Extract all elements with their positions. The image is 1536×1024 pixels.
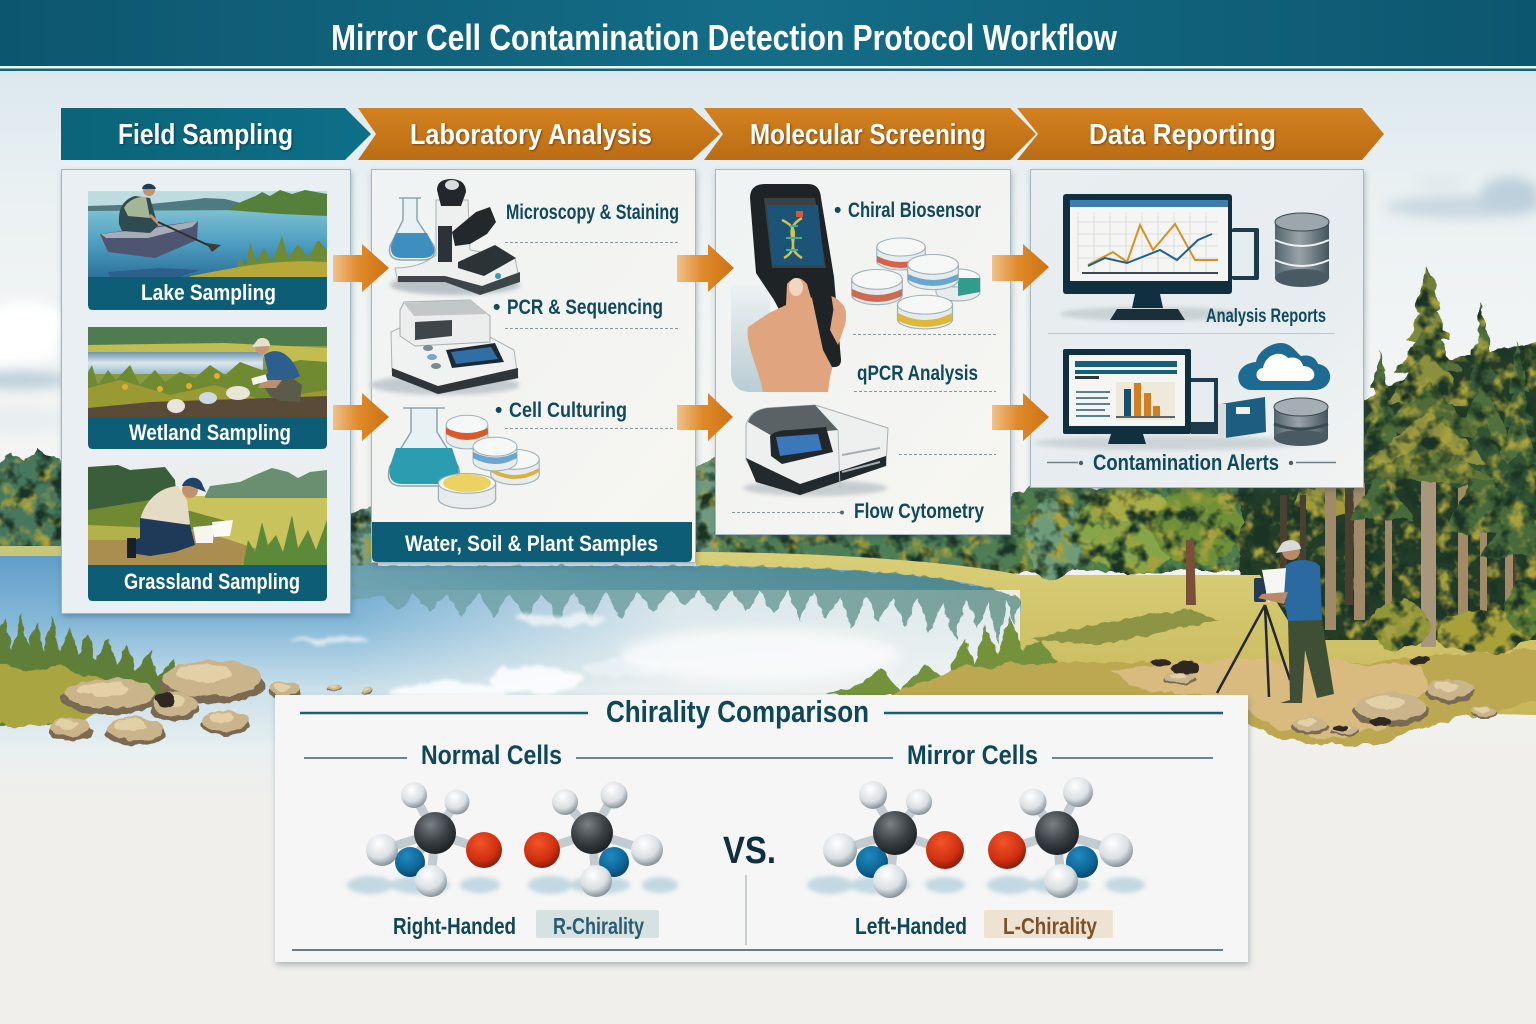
shore grass left [0, 612, 185, 725]
icon: PCR machine [370, 300, 520, 395]
label: Chiral Biosensor: Chiral Biosensor [848, 199, 981, 222]
heading: Mirror Cells: Mirror Cells [907, 740, 1038, 770]
arrow: lab to molecular bottom [677, 393, 733, 441]
rocks left [48, 660, 373, 746]
label: Wetland Sampling [88, 417, 327, 449]
label: PCR & Sequencing: PCR & Sequencing [507, 296, 663, 319]
forest floor shrubs [1370, 584, 1536, 654]
right ground [890, 650, 1536, 745]
icon: database stack [1275, 213, 1329, 287]
icon: database small [1274, 398, 1328, 446]
dark stones [155, 656, 1430, 731]
label: Wetland Sampling: Wetland Sampling [129, 420, 291, 445]
stage header: Field Sampling [61, 108, 371, 160]
stage header: Laboratory Analysis: Laboratory Analysis [410, 119, 652, 151]
lake clouds [290, 614, 658, 708]
label: Right-Handed: Right-Handed [393, 913, 516, 939]
conifers [1348, 265, 1536, 558]
stage header: Laboratory Analysis [358, 108, 720, 160]
label: Contamination Alerts: Contamination Alerts [1093, 450, 1279, 475]
shore band left [0, 546, 62, 556]
icon: alert monitor with bars [1035, 349, 1305, 450]
lake mist [350, 590, 1020, 705]
photo: lake sampling [88, 184, 327, 278]
label: Lake Sampling: Lake Sampling [141, 280, 276, 305]
label: L-Chirality: L-Chirality [1003, 913, 1097, 939]
surveyor figure with tripod [1217, 540, 1334, 703]
label: Water, Soil & Plant Samples: Water, Soil & Plant Samples [405, 531, 658, 556]
label: Cell Culturing: • [495, 399, 502, 422]
rocky path [1110, 660, 1430, 740]
label: Analysis Reports: Analysis Reports [1206, 306, 1326, 327]
label: R-Chirality: R-Chirality [553, 913, 644, 939]
panel: Molecular Screening [716, 170, 1010, 534]
icon: petri dishes [852, 238, 980, 329]
icon: hand-held biosensor [731, 184, 846, 392]
label: Microscopy & Staining: Microscopy & Staining [506, 201, 679, 224]
arrow: lab to molecular top [677, 244, 734, 292]
label: Grassland Sampling [88, 565, 327, 601]
label: Lake Sampling [88, 277, 327, 310]
icon: cloud inner [1256, 354, 1314, 381]
panel: Laboratory Analysis [370, 170, 696, 562]
label: VS.: VS. [723, 830, 776, 872]
label: Left-Handed: Left-Handed [855, 913, 967, 939]
icon: culture flask and dishes [388, 408, 539, 509]
title banner [0, 0, 1536, 71]
icon: flask and microscope [390, 179, 520, 295]
icon: analysis monitor with chart [1060, 194, 1259, 321]
title: Mirror Cell Contamination Detection Protocol Workflow [331, 17, 1118, 58]
molecule: normal cell 2 [524, 782, 678, 897]
distant tree line [0, 448, 1240, 575]
label: Water, Soil & Plant Samples [372, 522, 692, 562]
dark forest mass [1240, 340, 1536, 650]
arrow: field to lab bottom [333, 393, 389, 441]
photo: wetland sampling [88, 327, 327, 418]
photo: grassland sampling [88, 464, 327, 566]
label: Chiral Biosensor: • [834, 199, 841, 222]
arrow: field to lab top [333, 244, 389, 292]
stage header: Data Reporting: Data Reporting [1089, 119, 1276, 151]
icon: cloud [1238, 343, 1330, 390]
arrow: molecular to data bottom [992, 393, 1049, 441]
panel: Data Reporting [1030, 170, 1364, 488]
rocks right [1164, 672, 1498, 736]
molecule: mirror cell 1 [807, 781, 965, 898]
heading: Chirality Comparison: Chirality Comparison [606, 694, 869, 729]
label: Flow Cytometry: Flow Cytometry [854, 500, 984, 523]
label: PCR & Sequencing: • [493, 296, 500, 319]
blurred water highlight [620, 629, 900, 681]
label: Cell Culturing: Cell Culturing [509, 399, 627, 422]
stage header: Data Reporting [1017, 108, 1384, 160]
label: Flow Cytometry [732, 500, 984, 523]
stage header: Field Sampling: Field Sampling [118, 119, 293, 151]
molecule: mirror cell 2 [987, 777, 1145, 898]
icon: flow cytometer [743, 405, 888, 496]
meadow shrubs [1030, 610, 1220, 645]
lake [0, 556, 1021, 800]
label: qPCR Analysis: qPCR Analysis [857, 362, 978, 385]
trunks [1186, 455, 1515, 650]
stage header: Molecular Screening [704, 108, 1036, 160]
panel: Field Sampling [62, 170, 350, 614]
clouds left [0, 301, 70, 436]
stage header: Molecular Screening: Molecular Screening [750, 119, 986, 151]
deciduous trees [1025, 485, 1365, 580]
molecule: normal cell 1 [347, 782, 502, 897]
arrow: molecular to data top [992, 244, 1049, 291]
heading: Normal Cells: Normal Cells [421, 740, 562, 770]
panel: Chirality Comparison [275, 694, 1248, 962]
tree reflections [352, 566, 1020, 645]
meadow [696, 552, 1536, 715]
clouds right [1385, 176, 1536, 218]
label: Grassland Sampling: Grassland Sampling [124, 569, 300, 594]
shore yellow grass left [0, 660, 130, 728]
shore grass right [826, 615, 1060, 695]
